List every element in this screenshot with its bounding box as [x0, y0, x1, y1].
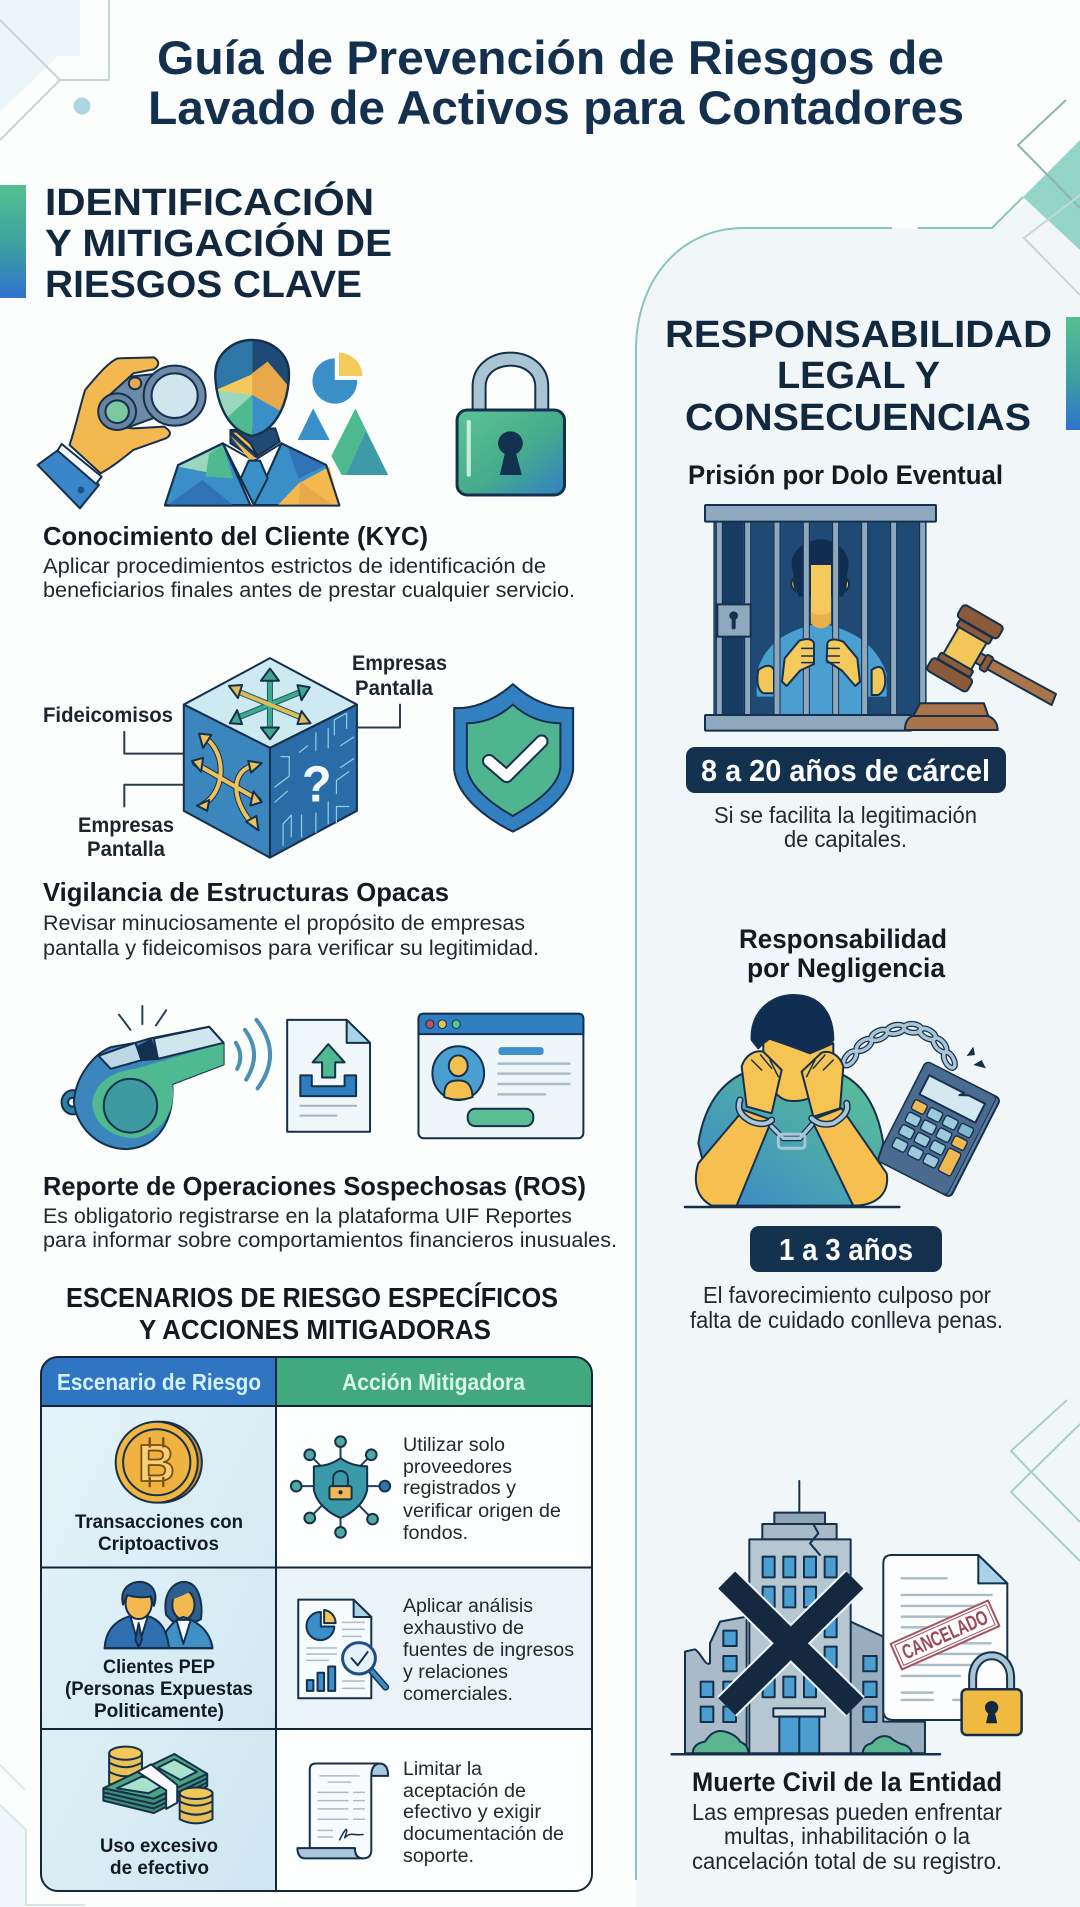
label: cash: Uso excesivo — [100, 1836, 218, 1857]
subheading: negligence: por Negligencia — [747, 953, 946, 983]
text: KYC: Aplicar procedimientos estrictos de identificación de — [43, 555, 546, 578]
lower right decorative chevrons — [1011, 1400, 1080, 1561]
text: cash action: aceptación de — [403, 1781, 526, 1802]
heading: risk scenarios: Y ACCIONES MITIGADORAS — [139, 1314, 491, 1345]
panel: identification and mitigation of key risks — [0, 180, 617, 1891]
label: PEP: Politicamente) — [94, 1701, 224, 1722]
icon: politically exposed persons — [105, 1582, 213, 1648]
text: cash action — [403, 1759, 564, 1867]
icon: KYC hand with binoculars and person — [38, 337, 388, 508]
text: negligence description: falta de cuidado conlleva penas. — [690, 1307, 1003, 1333]
icon: person behind bars with gavel — [705, 505, 1056, 731]
row 1: crypto — [75, 1422, 561, 1555]
text: KYC — [43, 521, 575, 602]
text: suspicious operations report: Es obligatorio registrarse en la plataforma UIF Reportes — [43, 1205, 572, 1228]
icon: green padlock — [457, 359, 565, 495]
label: cash — [100, 1836, 218, 1879]
heading accent bar — [1066, 317, 1080, 430]
panel background: right column — [636, 158, 1080, 1907]
table grid — [41, 1357, 592, 1891]
icon: cube labels — [43, 652, 447, 861]
icon: shield with check — [454, 684, 573, 832]
text: crypto action: proveedores — [403, 1457, 512, 1478]
text: PEP action: comerciales. — [403, 1684, 513, 1705]
table: scenarios and actions — [41, 1357, 592, 1891]
text: PEP action: y relaciones — [403, 1662, 508, 1683]
label: PEP: (Personas Expuestas — [65, 1679, 253, 1700]
label: crypto — [75, 1512, 243, 1555]
text: KYC: beneficiarios finales antes de prestar cualquier servicio. — [43, 579, 575, 602]
section heading: Y MITIGACIÓN DE — [45, 221, 392, 265]
text: crypto action: verificar origen de — [403, 1501, 561, 1522]
panel: legal responsibility and consequences — [665, 314, 1080, 1874]
stat: prison years: 8 a 20 años de cárcel — [701, 753, 990, 788]
icon: signed contract — [297, 1764, 388, 1858]
text: civil death of the entity: multas, inhabilitación o la — [724, 1823, 970, 1849]
text: crypto action: registrados y — [403, 1478, 517, 1499]
title: Lavado de Activos para Contadores — [148, 81, 964, 134]
text: opaque structures — [43, 877, 539, 960]
text: negligence description: El favorecimiento culposo por — [703, 1282, 991, 1308]
text: opaque structures: pantalla y fideicomisos para verificar su legitimidad. — [43, 937, 539, 960]
stat: negligence years — [750, 1226, 942, 1272]
table header labels: Escenario de Riesgo — [57, 1369, 261, 1395]
text: civil death of the entity: Las empresas pueden enfrentar — [692, 1799, 1002, 1825]
text: crypto action — [403, 1435, 561, 1544]
title — [148, 31, 964, 134]
icon: upload document — [287, 1020, 370, 1132]
heading: risk scenarios — [66, 1282, 558, 1345]
text: suspicious operations report — [43, 1171, 617, 1252]
table header labels — [57, 1369, 525, 1395]
text: crypto action: fondos. — [403, 1523, 468, 1544]
icon: cancelled company building and document: CANCELADO — [898, 1606, 992, 1664]
label: crypto: Transacciones con — [75, 1512, 243, 1533]
section heading: RESPONSABILIDAD — [665, 314, 1052, 356]
label: PEP — [65, 1657, 253, 1722]
text: cash action: documentación de — [403, 1824, 564, 1845]
text: negligence description — [690, 1282, 1003, 1333]
label: cash: de efectivo — [110, 1858, 209, 1879]
text: PEP action — [403, 1596, 574, 1705]
icon: shield network — [291, 1436, 390, 1538]
text: crypto action: Utilizar solo — [403, 1435, 505, 1456]
icon: bitcoin coin — [116, 1422, 202, 1503]
text: cash action: efectivo y exigir — [403, 1802, 542, 1823]
text: prison description — [714, 802, 977, 852]
text: PEP action: fuentes de ingresos — [403, 1640, 574, 1661]
text: cash action: Limitar la — [403, 1759, 482, 1780]
label: PEP: Clientes PEP — [103, 1657, 215, 1678]
stat: negligence years: 1 a 3 años — [779, 1232, 913, 1267]
text: prison description: Si se facilita la legitimación — [714, 802, 977, 828]
icon: cube labels: Empresas — [78, 814, 174, 837]
row 3: excessive cash — [100, 1747, 564, 1879]
icon: opaque structure cube — [124, 658, 400, 858]
table header labels: Acción Mitigadora — [342, 1369, 525, 1395]
text: suspicious operations report: Reporte de Operaciones Sospechosas (ROS) — [43, 1171, 586, 1201]
icon: cube labels: Fideicomisos — [43, 704, 173, 727]
text: opaque structures: Revisar minuciosamente el propósito de empresas — [43, 912, 525, 935]
text: suspicious operations report: para informar sobre comportamientos financieros inusuales. — [43, 1229, 617, 1252]
icon: cube labels: Pantalla — [87, 838, 165, 861]
icon: cube labels: Empresas — [352, 652, 447, 675]
subheading: negligence: Responsabilidad — [739, 924, 947, 954]
title: Guía de Prevención de Riesgos de — [157, 31, 944, 84]
icon: cube labels: Pantalla — [355, 677, 433, 700]
text: KYC: Conocimiento del Cliente (KYC) — [43, 521, 428, 551]
section heading: IDENTIFICACIÓN — [45, 180, 374, 224]
text: cash action: soporte. — [403, 1846, 474, 1867]
text: opaque structures: Vigilancia de Estructuras Opacas — [43, 877, 449, 907]
table cell backgrounds — [41, 1357, 592, 1891]
text: PEP action: exhaustivo de — [403, 1618, 524, 1639]
text: PEP action: Aplicar análisis — [403, 1596, 533, 1617]
icon: whistle — [62, 1006, 270, 1149]
section heading — [45, 180, 392, 306]
heading: risk scenarios: ESCENARIOS DE RIESGO ESPECÍFICOS — [66, 1282, 558, 1313]
icon: handcuffed person with broken calculator — [685, 995, 1001, 1207]
section heading: CONSECUENCIAS — [685, 397, 1031, 439]
label: crypto: Criptoactivos — [98, 1534, 219, 1555]
icon: cash and coins — [103, 1747, 213, 1823]
text: civil death of the entity: Muerte Civil de la Entidad — [692, 1767, 1002, 1797]
section heading: LEGAL Y — [777, 355, 940, 397]
text: civil death of the entity: cancelación total de su registro. — [692, 1848, 1002, 1874]
section heading — [665, 314, 1052, 439]
text: prison description: de capitales. — [784, 826, 907, 852]
icon: cancelled company building and document — [672, 1481, 1022, 1754]
icon: UIF platform window — [418, 1014, 583, 1138]
text: civil death of the entity — [692, 1767, 1002, 1874]
icon: bitcoin coin: B — [138, 1434, 175, 1492]
section heading: RIESGOS CLAVE — [45, 264, 362, 306]
icon: analysis document — [298, 1600, 386, 1698]
icon: opaque structure cube: ? — [302, 755, 332, 813]
subheading: prison: Prisión por Dolo Eventual — [688, 460, 1003, 490]
row 2: PEP clients — [65, 1582, 574, 1722]
panel outline: right column — [636, 197, 1023, 1880]
subheading: negligence — [739, 924, 947, 983]
heading accent bar — [0, 185, 26, 298]
